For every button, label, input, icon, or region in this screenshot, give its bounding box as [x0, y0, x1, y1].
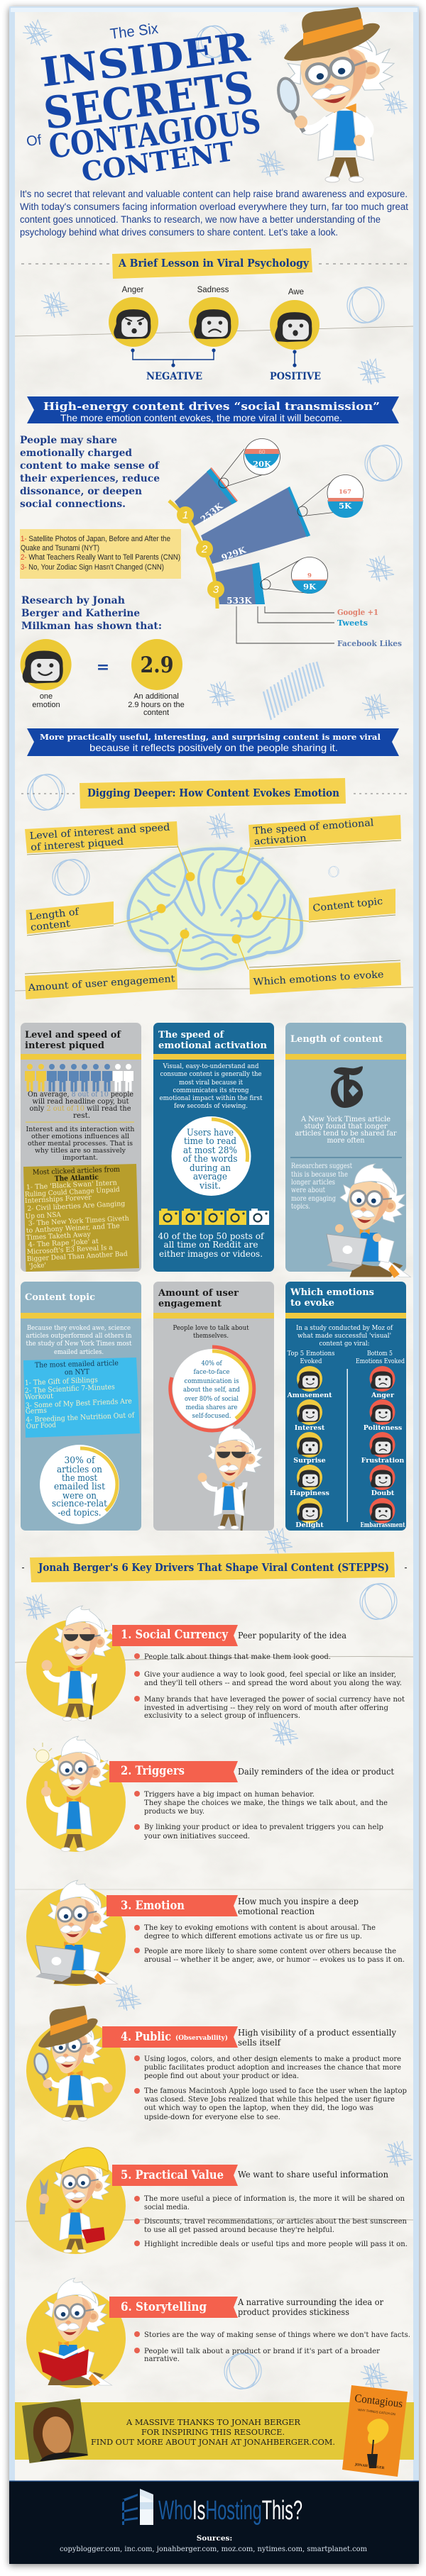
driver 4: public: The famous Macintosh Apple logo used to face the user when the laptop	[144, 2087, 407, 2095]
panel: level and speed of interest piqued: will read headline copy, but	[33, 1097, 129, 1106]
panel: speed of emotional activation: 40 of the top 50 posts of	[158, 1231, 265, 1241]
driver 4: public: people find out about your product or idea.	[144, 2072, 299, 2080]
panel: length of content: more often	[327, 1137, 365, 1145]
book cover: Contagious: JONAH BERGER	[354, 2463, 385, 2470]
panel: amount of user engagement: about the self, and	[183, 1386, 240, 1394]
tag: level of interest: of interest piqued	[31, 836, 124, 853]
panel: content topic: articles on	[57, 1465, 103, 1475]
panel: length of content: Length of content	[290, 1034, 383, 1045]
driver 4: public: was closed. Steve Jobs realized that while this helped the user figure	[144, 2095, 395, 2104]
panel: speed of emotional activation: during an	[190, 1163, 231, 1174]
driver 4: public: upside-down for everyone else to see.	[144, 2113, 280, 2121]
panel: level and speed of interest piqued: On average, 8 out of 10 people	[28, 1090, 133, 1099]
panel: speed of emotional activation: The speed of	[158, 1030, 224, 1040]
tag: level of interest: Level of interest and speed	[29, 822, 170, 842]
text: researchers suggest: longer articles	[291, 1179, 335, 1187]
thanks banner: FOR INSPIRING THIS RESOURCE.	[141, 2427, 285, 2437]
panel: level and speed of interest piqued: 4- The Rape 'Joke' at	[28, 1238, 99, 1249]
panel: level and speed of interest piqued: why titles are so massively	[35, 1147, 126, 1155]
panel: level and speed of interest piqued: Up on NSA	[26, 1211, 61, 1221]
equation: one emotion equals 2.9 hours: emotion	[32, 701, 60, 709]
banner: more practically useful: because it reflects positively on the people sharing it.	[89, 742, 338, 753]
panel: level and speed of interest piqued: important.	[62, 1154, 98, 1162]
panel: level and speed of interest piqued: other mental processes. That is	[28, 1140, 133, 1148]
text: research by Jonah Berger: Research by Jonah	[21, 595, 125, 606]
panel: speed of emotional activation: at most 28%	[183, 1145, 237, 1156]
driver 4: public: Using logos, colors, and other design elements to make a product more	[144, 2055, 401, 2063]
magnifier: article 2: 5K	[339, 501, 352, 511]
panel: amount of user engagement: media shares are	[186, 1404, 238, 1411]
title: CONTAGIOUS	[47, 102, 263, 166]
panel: which emotions to evoke: Bottom 5	[367, 1350, 393, 1358]
intro paragraph: psychology behind what drives consumers to share content. Let's take a look.	[20, 227, 338, 238]
panel: which emotions to evoke: what made successful 'visual'	[297, 1332, 391, 1340]
driver 5: practical value: Highlight incredible deals or useful tips and more people will pass it on.	[144, 2240, 408, 2248]
driver 2: triggers: products we buy.	[144, 1807, 204, 1816]
text: researchers suggest: were about	[291, 1187, 325, 1194]
top five emotion faces: Delight	[295, 1521, 324, 1529]
panel: content topic: Because they evoked awe, science	[27, 1324, 131, 1332]
panel: content topic: 2- The Scientific 7-Minutes	[25, 1383, 115, 1395]
panel: level and speed of interest piqued: Times Taketh Away	[26, 1231, 92, 1242]
panel: speed of emotional activation: most viral because it	[179, 1079, 243, 1087]
emotion: sadness	[189, 286, 239, 347]
book cover: Contagious	[342, 2385, 408, 2477]
heading: A Brief Lesson in Viral Psychology	[21, 248, 408, 279]
panel: speed of emotional activation: of the words	[183, 1154, 237, 1165]
panel: level and speed of interest piqued: Most clicked articles from	[33, 1166, 121, 1177]
driver 1: social currency: Peer popularity of the idea	[238, 1630, 346, 1640]
panel: content topic: The most emailed article	[35, 1360, 119, 1370]
radial bar chart of shares: 2	[201, 543, 208, 555]
panel: amount of user engagement: communication is	[185, 1377, 239, 1385]
equation: one emotion equals 2.9 hours: =	[97, 658, 109, 677]
magnifier: article 3: 9K	[303, 582, 317, 592]
panel: speed of emotional activation: all time on Reddit are	[163, 1239, 258, 1250]
text: researchers suggest	[291, 1162, 352, 1211]
panel: content topic: emailed articles.	[54, 1348, 104, 1356]
book cover: Contagious: Contagious	[354, 2392, 403, 2410]
panel: speed of emotional activation: emotional activation	[158, 1040, 268, 1051]
panel: level and speed of interest piqued: Interest and its interaction with	[26, 1126, 135, 1133]
panel: speed of emotional activation: communicates its strong	[173, 1087, 248, 1094]
panel: content topic: -ed topics.	[58, 1508, 101, 1519]
title: INSIDER	[38, 23, 253, 96]
panel: level and speed of interest piqued: The Atlantic	[55, 1174, 99, 1183]
panel: amount of user engagement	[153, 1282, 274, 1531]
panel: level and speed of interest piqued: 1- The 'Black Swan' Intern	[26, 1179, 117, 1192]
driver 5: practical value: Discounts, travel recommendations, or articles about the best sunscreen	[144, 2217, 407, 2226]
intro paragraph: It's no secret that relevant and valuable content can help raise brand awareness and exposure.	[20, 189, 408, 199]
top five emotion faces: Interest	[295, 1424, 325, 1432]
driver 1: social currency: invested in advertising -- they rely on word of mouth after offering	[144, 1704, 388, 1712]
driver 4: public: sells itself	[238, 2037, 281, 2048]
driver 2: triggers: your own initiatives succeed.	[143, 1832, 250, 1841]
chart legend: Facebook Likes	[337, 639, 402, 648]
top five emotion faces: Amusement	[286, 1392, 332, 1399]
panel: which emotions to evoke	[285, 1282, 406, 1531]
driver 1: social currency	[26, 1606, 405, 1721]
radial bar chart of shares	[169, 467, 310, 609]
panel: speed of emotional activation: time to read	[184, 1136, 236, 1147]
title: CONTENT	[80, 135, 236, 188]
driver 5: practical value: 5. Practical Value	[121, 2168, 224, 2182]
driver 3: emotion: How much you inspire a deep	[238, 1896, 359, 1906]
panel: which emotions to evoke: Which emotions	[290, 1287, 374, 1298]
panel: content topic: on NYT	[65, 1368, 89, 1377]
driver 4: public: High visibility of a product essentially	[238, 2027, 397, 2038]
panel: length of content	[285, 1023, 406, 1272]
panel: content topic: Content topic	[25, 1292, 95, 1303]
tag: length of content: Length of	[28, 906, 80, 923]
panel: amount of user engagement: engagement	[158, 1299, 222, 1309]
text: researchers suggest: more engaging	[291, 1195, 336, 1203]
panel: level and speed of interest piqued: only 2 out of 10 will read the	[30, 1104, 131, 1113]
driver 1: social currency: and they'll tell others -- and spread the word about you along the way.	[144, 1679, 402, 1687]
heading: Digging Deeper	[21, 778, 408, 809]
emotion: anger	[109, 286, 158, 347]
driver 6: storytelling: People will talk about a product or brand if it's part of a broader	[144, 2347, 381, 2355]
driver 2: triggers: By linking your product or idea to prevalent triggers you can help	[144, 1823, 383, 1831]
tag: content topic: Content topic	[312, 896, 383, 914]
driver 1: social currency: People talk about things that make them look good.	[144, 1653, 331, 1661]
text: research by Jonah Berger	[21, 595, 162, 632]
driver 5: practical value: social media.	[144, 2203, 190, 2211]
photo of Jonah Berger	[22, 2399, 88, 2463]
chart legend: Tweets	[337, 618, 368, 628]
panel: speed of emotional activation: emotional impact within the first	[159, 1094, 263, 1102]
driver 5: practical value: We want to share useful information	[238, 2169, 388, 2180]
driver 4: public	[26, 2006, 407, 2121]
text: people may share: People may share	[20, 435, 117, 446]
bottom five emotion faces: Embarrassment	[361, 1521, 405, 1529]
positive connector and label: POSITIVE	[270, 371, 321, 382]
panel: level and speed of interest piqued: 'Joke'	[29, 1262, 46, 1270]
panel: amount of user engagement: self-focused.	[192, 1412, 231, 1420]
panel: level and speed of interest piqued: Level and speed of	[25, 1030, 121, 1040]
panel: which emotions to evoke: content go viral:	[320, 1340, 369, 1348]
panel: length of content: A New York Times article	[300, 1116, 390, 1123]
driver 1: social currency: 1. Social Currency	[121, 1628, 229, 1642]
positive connector and label	[270, 350, 321, 382]
driver 2: triggers: They shape the choices we make, the things we talk about, and the	[144, 1799, 388, 1807]
driver 1: social currency: Give your audience a way to look good, feel special or like an insider,	[144, 1670, 396, 1679]
magnifier: article 3	[261, 557, 328, 594]
heading: Jonah Berger's 6 key drivers	[22, 1552, 407, 1582]
tag: speed of activation: The speed of emotional	[253, 817, 374, 837]
emotion: sadness: Sadness	[197, 286, 229, 294]
panel: amount of user engagement: People love to talk about	[173, 1324, 249, 1332]
equation: one emotion equals 2.9 hours: 2.9 hours on the	[128, 701, 185, 709]
driver 6: storytelling: product provides stickiness	[238, 2306, 349, 2317]
panel: which emotions to evoke: to evoke	[290, 1298, 334, 1309]
driver 3: emotion: degree to which different emotions activate us or fire us up.	[144, 1932, 362, 1941]
text: researchers suggest: topics.	[291, 1203, 310, 1211]
tag: user engagement	[25, 966, 178, 999]
driver 1: social currency: exclusivity to a select group of influencers.	[144, 1711, 300, 1720]
panel: amount of user engagement: 40% of	[202, 1360, 223, 1367]
banner: more practically useful: More practically useful, interesting, and surprising content is more viral	[40, 732, 381, 742]
panel: level and speed of interest piqued: Microsoft's E3 Reveal Is a	[27, 1244, 113, 1256]
panel: amount of user engagement: face-to-face	[193, 1368, 230, 1376]
panel: content topic	[21, 1282, 141, 1531]
footer	[9, 2481, 419, 2564]
character: professor with sunglasses in panel	[197, 1425, 263, 1531]
panel: content topic: Germs	[26, 1407, 47, 1416]
driver 6: storytelling: 6. Storytelling	[121, 2300, 207, 2314]
hero professor with magnifying glass	[275, 7, 400, 182]
panel: content topic: Workout	[25, 1392, 53, 1401]
panel: length of content: study found that longer	[304, 1123, 388, 1131]
panel: level and speed of interest piqued: Bigger Deal Than Another Bad	[27, 1250, 128, 1263]
note: article list	[20, 529, 181, 579]
banner: more practically useful	[27, 728, 399, 756]
bottom five emotion faces: Frustration	[361, 1457, 404, 1465]
driver 6: storytelling: Stories are the way of making sense of things where we don't have facts.	[144, 2331, 410, 2339]
text: research by Jonah Berger: Milkman has shown that:	[21, 621, 162, 632]
driver 2: triggers: Triggers have a big impact on human behavior.	[144, 1790, 315, 1799]
panel: which emotions to evoke: Top 5 Emotions	[287, 1350, 335, 1358]
panel: level and speed of interest piqued: other emotions influences all	[31, 1133, 129, 1140]
emotion: awe	[270, 288, 320, 350]
emotion: anger: Anger	[122, 286, 144, 294]
footer: Sources:	[197, 2534, 232, 2543]
panel: content topic: articles outperformed all others in	[26, 1332, 132, 1340]
text: people may share: dissonance, or deepen	[20, 486, 142, 497]
panel: amount of user engagement: themselves.	[193, 1332, 229, 1340]
equation: one emotion equals 2.9 hours: one	[40, 692, 53, 701]
footer: WhoIsHostingThis?	[158, 2496, 302, 2526]
heading: A Brief Lesson in Viral Psychology: A Brief Lesson in Viral Psychology	[118, 257, 310, 270]
thanks banner: FIND OUT MORE ABOUT JONAH AT JONAHBERGER.COM.	[91, 2437, 335, 2447]
panel: speed of emotional activation	[153, 1023, 274, 1272]
chart legend: Google +1	[337, 608, 378, 617]
negative connector and label	[131, 348, 216, 382]
heading: Digging Deeper: Digging Deeper: How Content Evokes Emotion	[87, 787, 339, 799]
book cover: Contagious: WHY THINGS CATCH ON	[358, 2408, 395, 2416]
panel: speed of emotional activation: few seconds of viewing.	[174, 1102, 248, 1110]
driver 2: triggers	[26, 1736, 394, 1852]
panel: speed of emotional activation: visit.	[199, 1181, 221, 1192]
tag: length of content	[26, 901, 114, 936]
intro paragraph: With today's consumers facing information overload everywhere they turn, far too much great	[20, 201, 408, 212]
radial bar chart of shares: 253K	[199, 501, 225, 524]
equation: one emotion equals 2.9 hours: 2.9	[141, 653, 173, 678]
panel: level and speed of interest piqued	[21, 1023, 141, 1272]
chart legend	[236, 606, 402, 648]
panel: level and speed of interest piqued: rest.	[73, 1111, 90, 1120]
panel: which emotions to evoke: Evoked	[300, 1358, 322, 1365]
tag: length of content: content	[30, 918, 71, 933]
note: article list: Quake and Tsunami (NYT)	[21, 544, 99, 553]
driver 2: triggers: 2. Triggers	[121, 1764, 185, 1778]
thanks banner	[15, 2402, 414, 2460]
equation: one emotion equals 2.9 hours: content	[143, 709, 169, 717]
panel: level and speed of interest piqued: 3- The New York Times Giveth	[28, 1215, 129, 1228]
tag: user engagement: Amount of user engagement	[27, 973, 175, 994]
tag: which emotions	[249, 960, 401, 994]
banner: high-energy content: The more emotion content evokes, the more viral it will become.	[60, 412, 342, 423]
driver 5: practical value: to use all get passed around because they're helpful.	[144, 2226, 334, 2234]
driver 3: emotion	[26, 1880, 405, 1986]
emotion: awe: Awe	[288, 288, 304, 296]
thanks banner: A MASSIVE THANKS TO JONAH BERGER	[126, 2417, 300, 2427]
driver 2: triggers: Daily reminders of the idea or product	[238, 1766, 394, 1777]
text: researchers suggest: this is because the	[291, 1171, 348, 1179]
driver 3: emotion: People are more likely to share some content over others because the	[144, 1947, 396, 1955]
bottom five emotion faces: Doubt	[371, 1489, 395, 1497]
top five emotion faces	[286, 1366, 332, 1529]
panel: which emotions to evoke: In a study conducted by Moz of	[296, 1324, 393, 1332]
driver 3: emotion: arousal -- whether it be anger, awe, or humor -- evokes us to pass it on.	[144, 1955, 405, 1964]
panel: level and speed of interest piqued: Ruling Could Change Unpaid	[25, 1186, 120, 1199]
banner: high-energy content: High-energy content drives “social transmission”	[43, 400, 380, 413]
panel: content topic: 3- Some of My Best Friends Are	[26, 1397, 132, 1410]
panel: length of content: articles tend to be shared far	[295, 1130, 397, 1138]
panel: level and speed of interest piqued: interest piqued	[25, 1040, 104, 1051]
panel: level and speed of interest piqued: 2- Civil liberties Are Ganging	[27, 1200, 125, 1213]
panel: content topic: the study of New York Times most	[26, 1340, 132, 1348]
driver 3: emotion: emotional reaction	[238, 1906, 315, 1916]
title: SECRETS	[41, 61, 256, 140]
panel: speed of emotional activation: average	[193, 1172, 227, 1182]
driver 4: public: 4. Public	[121, 2030, 171, 2044]
equation: one emotion equals 2.9 hours	[21, 639, 185, 717]
character: professor with laptop	[327, 1160, 410, 1278]
panel: amount of user engagement: over 80% of social	[185, 1395, 239, 1403]
driver 4: public: (Observability)	[175, 2034, 228, 2042]
intro paragraph	[20, 189, 408, 238]
panel: amount of user engagement: Amount of user	[158, 1288, 239, 1299]
panel: content topic: the most	[62, 1473, 98, 1484]
radial bar chart of shares: 533K	[226, 596, 252, 606]
magnifier: article 3: 9	[307, 572, 312, 579]
text: people may share: their experiences, reduce	[20, 473, 160, 484]
note: article list: 1- Satellite Photos of Japan, Before and After the	[21, 535, 170, 543]
negative connector and label: NEGATIVE	[146, 371, 202, 382]
panel: content topic: Our Food	[26, 1421, 57, 1431]
panel: content topic: 30% of	[64, 1455, 96, 1466]
panel: speed of emotional activation: Visual, easy-to-understand and	[163, 1062, 258, 1070]
driver 4: public: public facilitates product adoption and increases the chance that more	[144, 2063, 401, 2072]
panel: content topic: 4- Breeding the Nutrition Out of	[26, 1411, 136, 1424]
title	[26, 21, 263, 188]
tag: level of interest	[25, 821, 178, 855]
footer: copyblogger.com, inc.com, jonahberger.com, moz.com, nytimes.com, smartplanet.com	[60, 2546, 368, 2553]
magnifier: article 2	[297, 475, 364, 518]
driver 5: practical value	[26, 2148, 408, 2254]
text: researchers suggest: Researchers suggest	[291, 1162, 352, 1170]
tag: which emotions: Which emotions to evoke	[253, 969, 384, 988]
bottom five emotion faces	[361, 1366, 405, 1529]
top five emotion faces: Surprise	[293, 1457, 326, 1465]
panel: content topic: science-relat	[52, 1499, 108, 1509]
driver 4: public: out which way to open the laptop, when they did, the logo was	[144, 2104, 373, 2112]
magnifier: article 1: 20K	[253, 459, 272, 469]
brain diagram	[114, 845, 309, 970]
text: people may share: content to make sense of	[20, 460, 160, 472]
driver 6: storytelling	[26, 2278, 410, 2388]
radial bar chart of shares: 1	[182, 509, 188, 521]
panel: speed of emotional activation: consume content is generally the	[160, 1070, 262, 1078]
panel: which emotions to evoke: Emotions Evoked	[356, 1358, 405, 1365]
tag: speed of activation: activation	[253, 833, 307, 848]
note: article list: 2- What Teachers Really Want to Tell Parents (CNN)	[21, 553, 180, 562]
top five emotion faces: Happiness	[290, 1489, 329, 1497]
text: people may share: social connections.	[20, 499, 126, 510]
tag: speed of activation	[248, 815, 401, 849]
title: The Six	[109, 21, 160, 43]
driver 5: practical value: The more useful a piece of information is, the more it will be shared on	[144, 2194, 405, 2203]
text: people may share: emotionally charged	[20, 448, 132, 459]
text: people may share	[20, 435, 160, 510]
panel: content topic: were on	[62, 1491, 97, 1501]
radial bar chart of shares: 3	[213, 584, 219, 596]
equation: one emotion equals 2.9 hours: An additional	[133, 692, 179, 701]
driver 6: storytelling: narrative.	[144, 2355, 180, 2363]
bottom five emotion faces: Anger	[371, 1392, 395, 1399]
driver 1: social currency: Many brands that have leveraged the power of social currency have not	[144, 1695, 405, 1704]
note: article list: 3- No, Your Zodiac Sign Hasn't Changed (CNN)	[21, 563, 164, 572]
panel: content topic: 1- The Gift of Siblings	[25, 1377, 98, 1387]
driver 3: emotion: The key to evoking emotions with content is about arousal. The	[144, 1923, 376, 1932]
text: research by Jonah Berger: Berger and Katherine	[21, 608, 140, 619]
radial bar chart of shares: 929K	[220, 545, 248, 563]
driver 3: emotion: 3. Emotion	[121, 1899, 185, 1913]
heading: Jonah Berger's 6 key drivers: Jonah Berger's 6 Key Drivers That Shape Viral Content (STEPPS)	[37, 1561, 389, 1574]
panel: level and speed of interest piqued: to Anthony Weiner, and The	[26, 1222, 120, 1235]
tag: content topic	[309, 889, 395, 922]
intro paragraph: content goes unnoticed. Thanks to research, we now have a better understanding of the	[20, 214, 381, 225]
magnifier: article 1: 60	[259, 449, 266, 455]
title: Of	[26, 132, 43, 150]
banner: high-energy content	[27, 396, 399, 423]
bottom five emotion faces: Politeness	[364, 1424, 402, 1432]
magnifier: article 1	[219, 438, 280, 488]
panel: level and speed of interest piqued: Internships Forever	[25, 1194, 92, 1205]
panel: speed of emotional activation: Users have	[187, 1128, 234, 1138]
magnifier: article 2: 167	[339, 489, 351, 496]
driver 6: storytelling: A narrative surrounding the idea or	[237, 2297, 383, 2307]
panel: content topic: emailed list	[54, 1482, 106, 1492]
panel: speed of emotional activation: either images or videos.	[159, 1248, 263, 1259]
